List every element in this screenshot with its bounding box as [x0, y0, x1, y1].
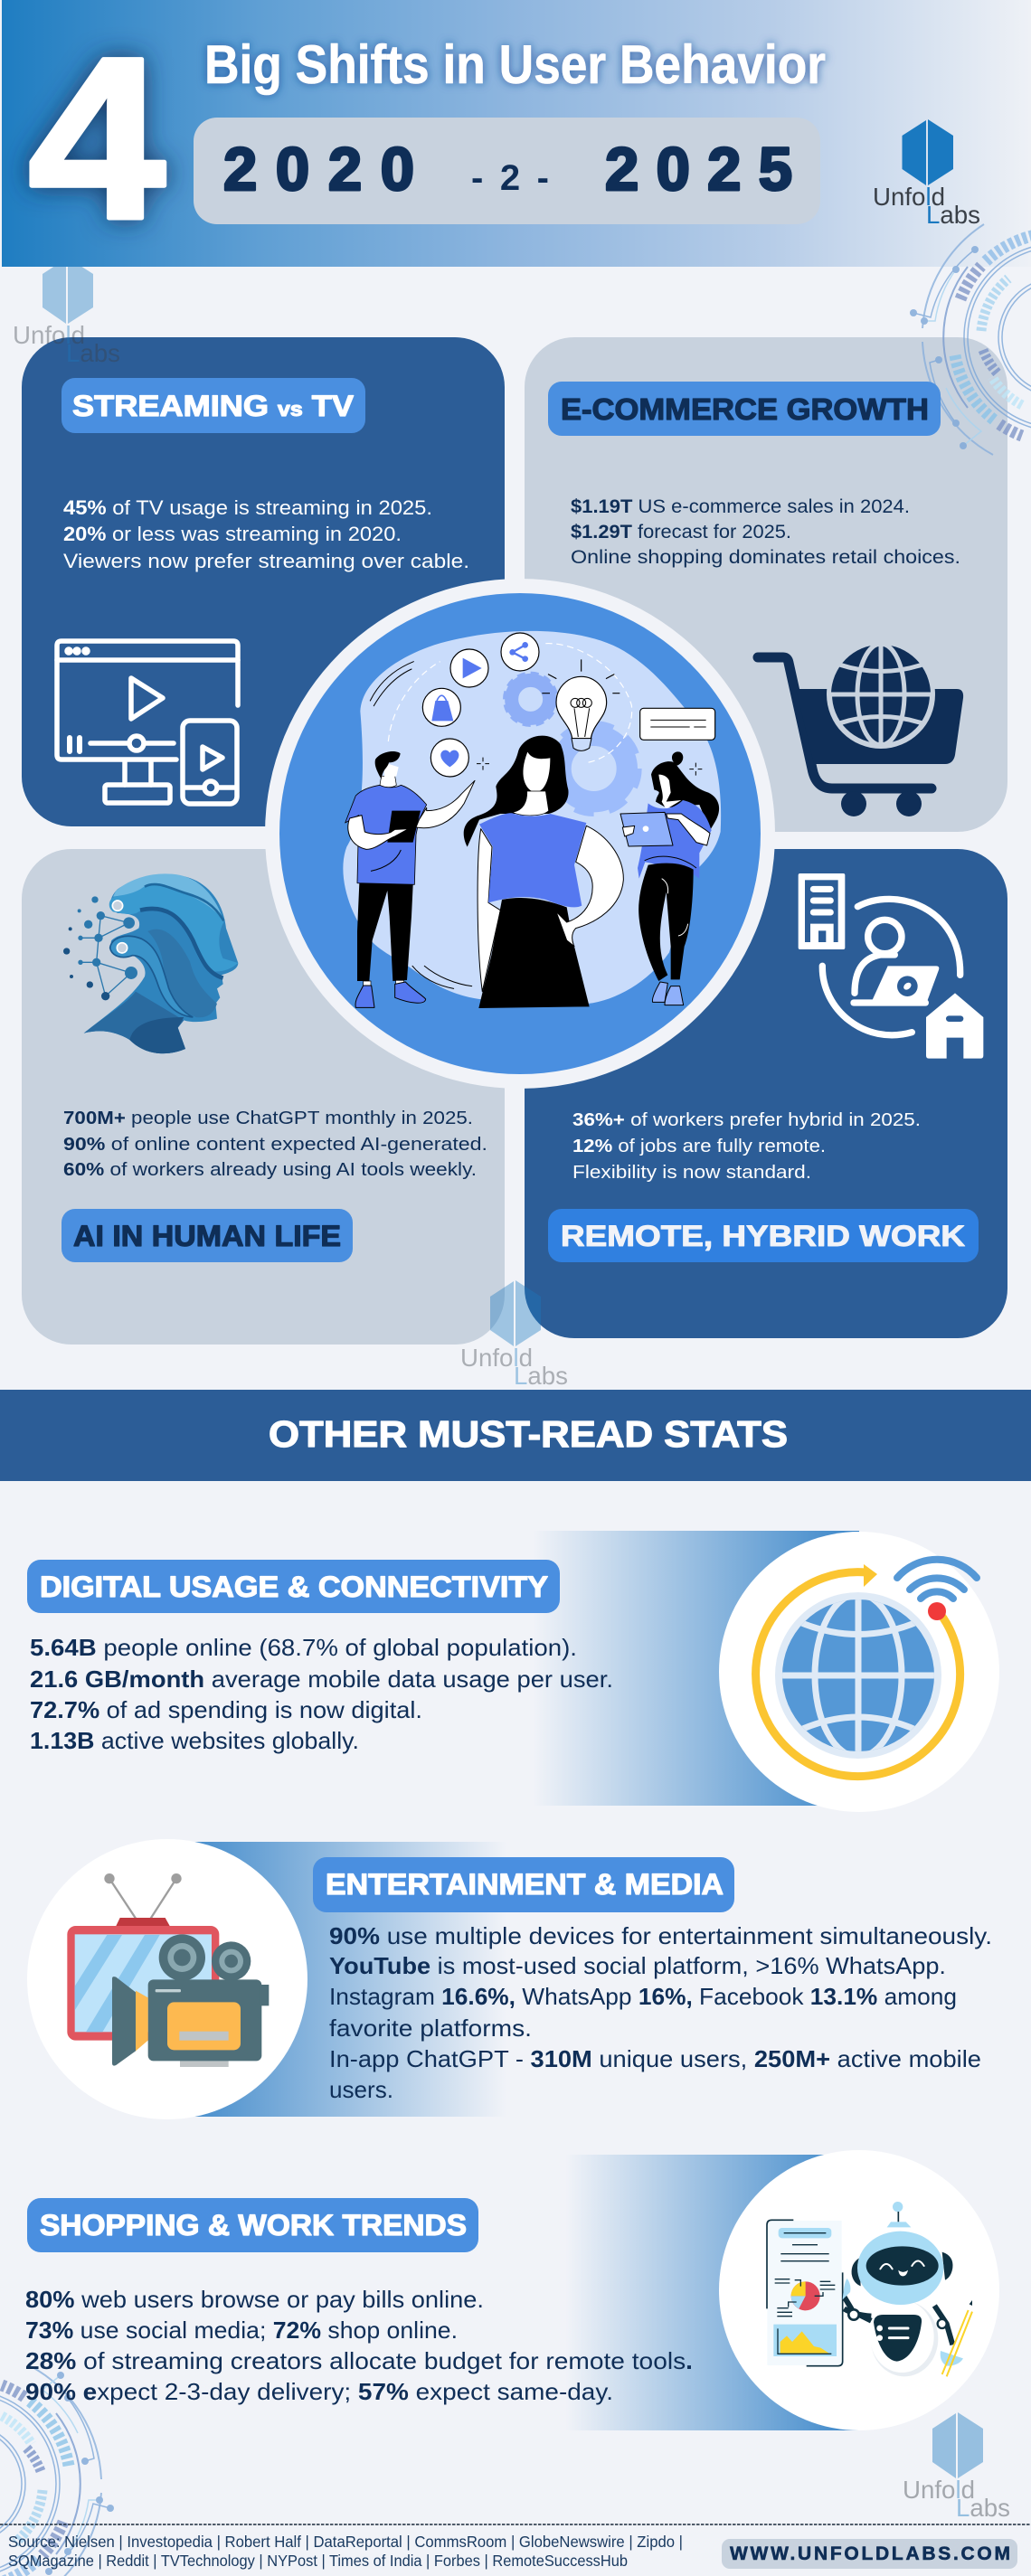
icon: tv and video camera	[67, 1873, 269, 2067]
heading: AI in human life	[61, 1209, 353, 1262]
panel: e-commerce background	[525, 337, 1007, 832]
text: entertainment stats	[329, 1922, 992, 2103]
heading: streaming vs tv	[61, 378, 365, 433]
heading: entertainment	[313, 1857, 734, 1912]
text: shopping stats: 90% expect 2-3-day delivery; 57% expect same-day.	[25, 2378, 613, 2405]
year range pill: 2025	[605, 136, 792, 203]
text: digital stats: 72.7% of ad spending is now digital.	[30, 1696, 422, 1723]
text: digital stats	[30, 1634, 613, 1754]
heading: digital usage: DIGITAL USAGE & CONNECTIVITY	[40, 1571, 548, 1603]
text: e-commerce stats	[571, 496, 960, 568]
tech circle bottom left	[0, 2366, 114, 2576]
watermark logo: center: Unfold	[460, 1344, 533, 1372]
text: shopping stats: 80% web users browse or pay bills online.	[25, 2286, 484, 2313]
text: remote stats: Flexibility is now standard.	[572, 1162, 811, 1183]
light blob	[343, 631, 721, 1004]
footer sources	[8, 2533, 683, 2570]
heading: AI in human life: AI IN HUMAN LIFE	[73, 1220, 341, 1252]
icon: monitor and phone	[57, 641, 238, 804]
heading: remote, hybrid work	[548, 1209, 979, 1262]
footer sources: Source: Nielsen | Investopedia | Robert Half | DataReportal | CommsRoom | GlobeNewswire | Zipdo |	[8, 2533, 683, 2551]
sparkles	[477, 758, 702, 776]
section banner: other must-read stats	[0, 1390, 1031, 1481]
watermark logo: bottom right: Labs	[956, 2494, 1010, 2522]
icon: robot with report	[767, 2202, 972, 2376]
center illustration circle	[265, 579, 775, 1089]
watermark logo: top left: Unfold	[13, 321, 85, 349]
panel: AI in human life	[22, 849, 505, 1345]
logo: Unfold Labs header: Labs	[926, 201, 980, 229]
text: entertainment stats: YouTube is most-used social platform, >16% WhatsApp.	[329, 1952, 946, 1979]
text: streaming stats	[63, 496, 469, 572]
text: digital stats: 1.13B active websites globally.	[30, 1727, 359, 1754]
text: digital stats: 5.64B people online (68.7% of global population).	[30, 1634, 577, 1661]
text: e-commerce stats: $1.19T US e-commerce sales in 2024.	[571, 496, 910, 517]
dashed orbit	[388, 644, 632, 762]
logo: Unfold Labs header: Unfold	[873, 183, 945, 211]
heading: shopping	[27, 2198, 478, 2252]
tech circle top right	[910, 224, 1031, 455]
watermark logo: top left	[14, 267, 119, 362]
light bulb	[542, 659, 620, 750]
icon: AI head	[63, 873, 238, 1053]
text: remote stats	[572, 1109, 921, 1183]
title: Big Shifts in User Behavior	[204, 34, 826, 95]
text: streaming stats: 20% or less was streaming in 2020.	[63, 523, 402, 545]
panel: streaming background	[22, 337, 505, 826]
watermark logo: top left: Labs	[66, 339, 120, 367]
center woman figure	[464, 736, 623, 1008]
text: shopping stats	[25, 2286, 693, 2405]
panel: remote, hybrid work	[525, 849, 1007, 1338]
text: e-commerce stats: Online shopping dominates retail choices.	[571, 547, 960, 568]
text: streaming stats: 45% of TV usage is streaming in 2025.	[63, 496, 432, 519]
heading: digital usage	[27, 1560, 560, 1613]
motion lines	[370, 662, 472, 988]
text: entertainment stats: 90% use multiple devices for entertainment simultaneously.	[329, 1922, 992, 1949]
speech note	[640, 708, 715, 740]
heading: shopping: SHOPPING & WORK TRENDS	[40, 2209, 467, 2241]
text: remote stats: 36%+ of workers prefer hybrid in 2025.	[572, 1109, 921, 1130]
text: AI stats: 90% of online content expected AI-generated.	[63, 1134, 487, 1155]
watermark logo: bottom right: Unfold	[903, 2476, 975, 2504]
year range pill: 2020	[223, 136, 414, 203]
header banner	[2, 0, 1031, 268]
gears	[506, 674, 638, 812]
watermark logo: center	[460, 1280, 568, 1390]
man figure	[345, 751, 475, 1007]
heading: remote, hybrid work: REMOTE, HYBRID WORK	[561, 1220, 965, 1252]
icon: remote work	[799, 873, 983, 1059]
social icons	[422, 633, 539, 777]
text: AI stats	[63, 1108, 487, 1180]
big number 4: 4	[28, 10, 166, 268]
logo: Unfold Labs header	[873, 119, 980, 229]
website badge: WWW.UNFOLDLABS.COM	[730, 2543, 1010, 2564]
website badge	[722, 2539, 1017, 2569]
section: entertainment and media	[27, 1839, 992, 2119]
text: shopping stats: 28% of streaming creators allocate budget for remote tools .	[25, 2347, 693, 2374]
footer sources: SQMagazine | Reddit | TVTechnology | NYPost | Times of India | Forbes | RemoteSuccessHub	[8, 2552, 628, 2570]
panel: e-commerce growth	[548, 382, 963, 816]
watermark logo: center: Labs	[514, 1362, 568, 1390]
text: AI stats: 700M+ people use ChatGPT monthly in 2025.	[63, 1108, 473, 1128]
year range pill: -2-	[471, 158, 549, 198]
panel: streaming vs TV	[57, 378, 469, 804]
text: e-commerce stats: $1.29T forecast for 2025.	[571, 522, 791, 543]
right woman figure	[620, 751, 719, 1005]
section banner: other must-read stats: OTHER MUST-READ STATS	[269, 1413, 788, 1455]
footer	[0, 2524, 1031, 2570]
text: remote stats: 12% of jobs are fully remote.	[572, 1136, 826, 1156]
section: shopping and work trends	[25, 2150, 999, 2430]
icon: shopping cart with globe	[758, 640, 963, 816]
heading: e-commerce: E-COMMERCE GROWTH	[561, 392, 929, 426]
section: digital usage and connectivity	[27, 1531, 999, 1812]
text: entertainment stats: favorite platforms.	[329, 2015, 532, 2042]
text: streaming stats: Viewers now prefer streaming over cable.	[63, 550, 469, 572]
icon: globe with wifi	[756, 1560, 977, 1777]
heading: entertainment: ENTERTAINMENT & MEDIA	[326, 1868, 724, 1901]
watermark logo: bottom right	[903, 2412, 1010, 2522]
heading: e-commerce	[548, 382, 941, 436]
heading: streaming vs tv: STREAMING vs TV	[72, 390, 355, 422]
text: entertainment stats: Instagram 16.6%, WhatsApp 16%, Facebook 13.1% among	[329, 1983, 957, 2010]
text: entertainment stats: In-app ChatGPT - 310M unique users, 250M+ active mobile	[329, 2045, 981, 2072]
text: shopping stats: 73% use social media; 72% shop online.	[25, 2317, 458, 2344]
year range pill	[194, 118, 820, 224]
text: AI stats: 60% of workers already using AI tools weekly.	[63, 1159, 477, 1180]
text: entertainment stats: users.	[329, 2076, 393, 2103]
text: digital stats: 21.6 GB/month average mobile data usage per user.	[30, 1665, 613, 1693]
